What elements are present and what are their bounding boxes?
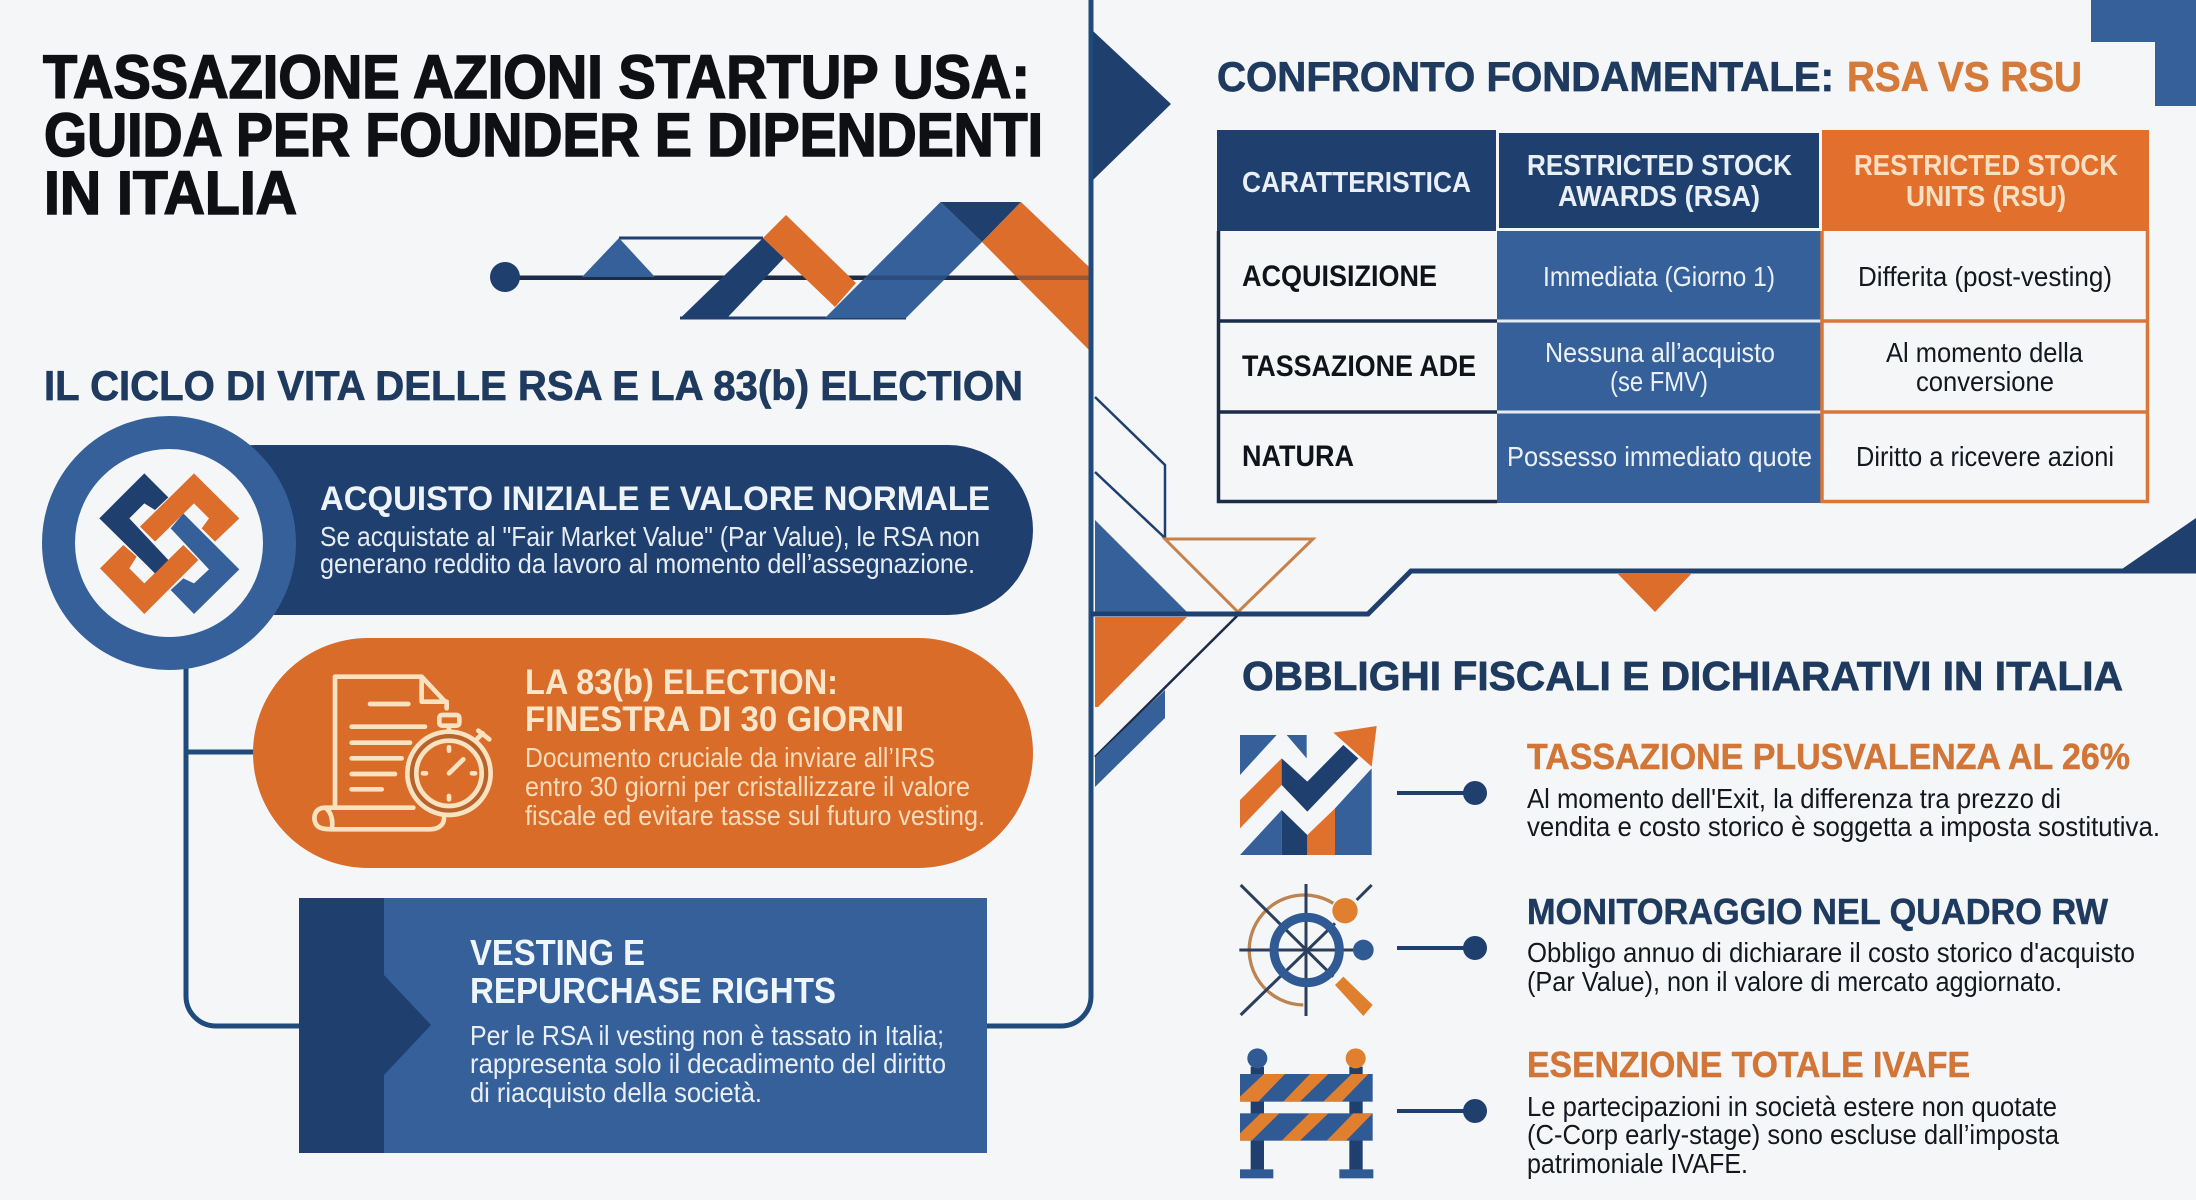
item 2 description: (Par Value), non il valore di mercato aggiornato. [1527, 966, 2062, 997]
RSA column values: Possesso immediato quote [1507, 441, 1812, 472]
item 2 description: Obbligo annuo di dichiarare il costo storico d'acquisto [1527, 937, 2135, 968]
step 2 title: FINESTRA DI 30 GIORNI [525, 700, 904, 739]
item 3: IVAFE exemption [1240, 1044, 2059, 1179]
step 2 description: Documento cruciale da inviare all’IRS [525, 742, 935, 773]
step 2 title [525, 663, 904, 739]
section heading: comparison: RSA VS RSU [1847, 53, 2082, 100]
step 2 pill: 83(b) election [253, 638, 1033, 868]
RSA column values: Nessuna all’acquisto [1545, 337, 1775, 368]
item 2: RW monitoring [1239, 884, 2135, 1016]
comparison table [1217, 130, 2149, 503]
step 3 box: vesting [299, 898, 987, 1153]
icon: ship wheel with magnifier [1239, 884, 1374, 1016]
section heading: comparison: CONFRONTO FONDAMENTALE: [1217, 53, 1834, 100]
table row labels: TASSAZIONE ADE [1242, 350, 1476, 383]
step 3 title: REPURCHASE RIGHTS [470, 970, 836, 1011]
step 2 title: LA 83(b) ELECTION: [525, 663, 838, 702]
item 3 description [1527, 1091, 2059, 1179]
step 1 description: Se acquistate al "Fair Market Value" (Par Value), le RSA non [320, 521, 980, 552]
decorative zigzag ribbon under title [490, 202, 1091, 350]
icon: road barrier [1240, 1048, 1373, 1178]
item 1 description: Al momento dell'Exit, la differenza tra prezzo di [1527, 783, 2061, 814]
RSA column values: Immediata (Giorno 1) [1543, 261, 1775, 292]
main title: IN ITALIA [44, 159, 297, 227]
item 3 title: ESENZIONE TOTALE IVAFE [1527, 1044, 1970, 1085]
table row labels: ACQUISIZIONE [1242, 260, 1437, 293]
step 3 title: VESTING E [470, 932, 645, 973]
item 1 description [1527, 783, 2160, 842]
connector dot 1 [1397, 781, 1487, 805]
step 3 description: Per le RSA il vesting non è tassato in Italia; [470, 1020, 944, 1051]
RSA column values [1507, 261, 1812, 472]
RSU column values: conversione [1916, 366, 2054, 397]
item 3 description: (C-Corp early-stage) sono escluse dall’imposta [1527, 1119, 2059, 1150]
flow connector and vertical divider [186, 0, 1091, 1026]
step 1 description [320, 521, 980, 579]
step 1 title: ACQUISTO INIZIALE E VALORE NORMALE [320, 480, 990, 518]
table row labels: NATURA [1242, 440, 1354, 473]
item 3 description: Le partecipazioni in società estere non quotate [1527, 1091, 2057, 1122]
step 1 pill: acquisto iniziale [170, 445, 1033, 615]
table header row: RESTRICTED STOCK [1527, 150, 1792, 182]
step 2 description: fiscale ed evitare tasse sul futuro vesting. [525, 800, 985, 831]
item 1: capital gains tax [1240, 726, 2160, 855]
table row labels [1242, 260, 1476, 473]
item 2 title: MONITORAGGIO NEL QUADRO RW [1527, 891, 2108, 932]
RSU column values: Al momento della [1886, 337, 2083, 368]
main title: GUIDA PER FOUNDER E DIPENDENTI [44, 101, 1043, 169]
step 3 description: rappresenta solo il decadimento del diritto [470, 1048, 946, 1079]
table column backgrounds and grid [1218, 231, 2148, 503]
item 1 description: vendita e costo storico è soggetta a imposta sostitutiva. [1527, 811, 2160, 842]
item 2 description [1527, 937, 2135, 997]
table header row [1217, 130, 2149, 231]
decorative geometry on central divider [1091, 0, 2196, 787]
item 3 description: patrimoniale IVAFE. [1527, 1148, 1748, 1179]
icon: interlocked knot in circle [58, 432, 280, 654]
main title [43, 43, 1043, 227]
section heading: RSA lifecycle: IL CICLO DI VITA DELLE RSA E LA 83(b) ELECTION [44, 362, 1023, 409]
RSU column values [1856, 261, 2114, 472]
table header row: CARATTERISTICA [1242, 167, 1471, 199]
connector dot 3 [1397, 1099, 1487, 1123]
step 2 description [525, 742, 985, 831]
table header row: RESTRICTED STOCK [1854, 150, 2118, 182]
main title: TASSAZIONE AZIONI STARTUP USA: [43, 43, 1030, 111]
step 1 description: generano reddito da lavoro al momento dell’assegnazione. [320, 548, 975, 579]
section heading: fiscal obligations: OBBLIGHI FISCALI E DICHIARATIVI IN ITALIA [1242, 653, 2123, 699]
RSA column values: (se FMV) [1610, 366, 1708, 397]
icon: rising chart arrow [1240, 726, 1377, 855]
item 1 title: TASSAZIONE PLUSVALENZA AL 26% [1527, 736, 2130, 777]
step 3 description: di riacquisto della società. [470, 1077, 762, 1108]
step 3 title [470, 932, 836, 1011]
RSU column values: Diritto a ricevere azioni [1856, 441, 2114, 472]
step 3 description [470, 1020, 946, 1108]
table header row: UNITS (RSU) [1906, 181, 2066, 213]
icon: document with stopwatch [314, 677, 491, 829]
table header row: AWARDS (RSA) [1558, 181, 1760, 213]
step 2 description: entro 30 giorni per cristallizzare il valore [525, 771, 970, 802]
connector dot 2 [1397, 936, 1487, 960]
RSU column values: Differita (post-vesting) [1858, 261, 2112, 292]
